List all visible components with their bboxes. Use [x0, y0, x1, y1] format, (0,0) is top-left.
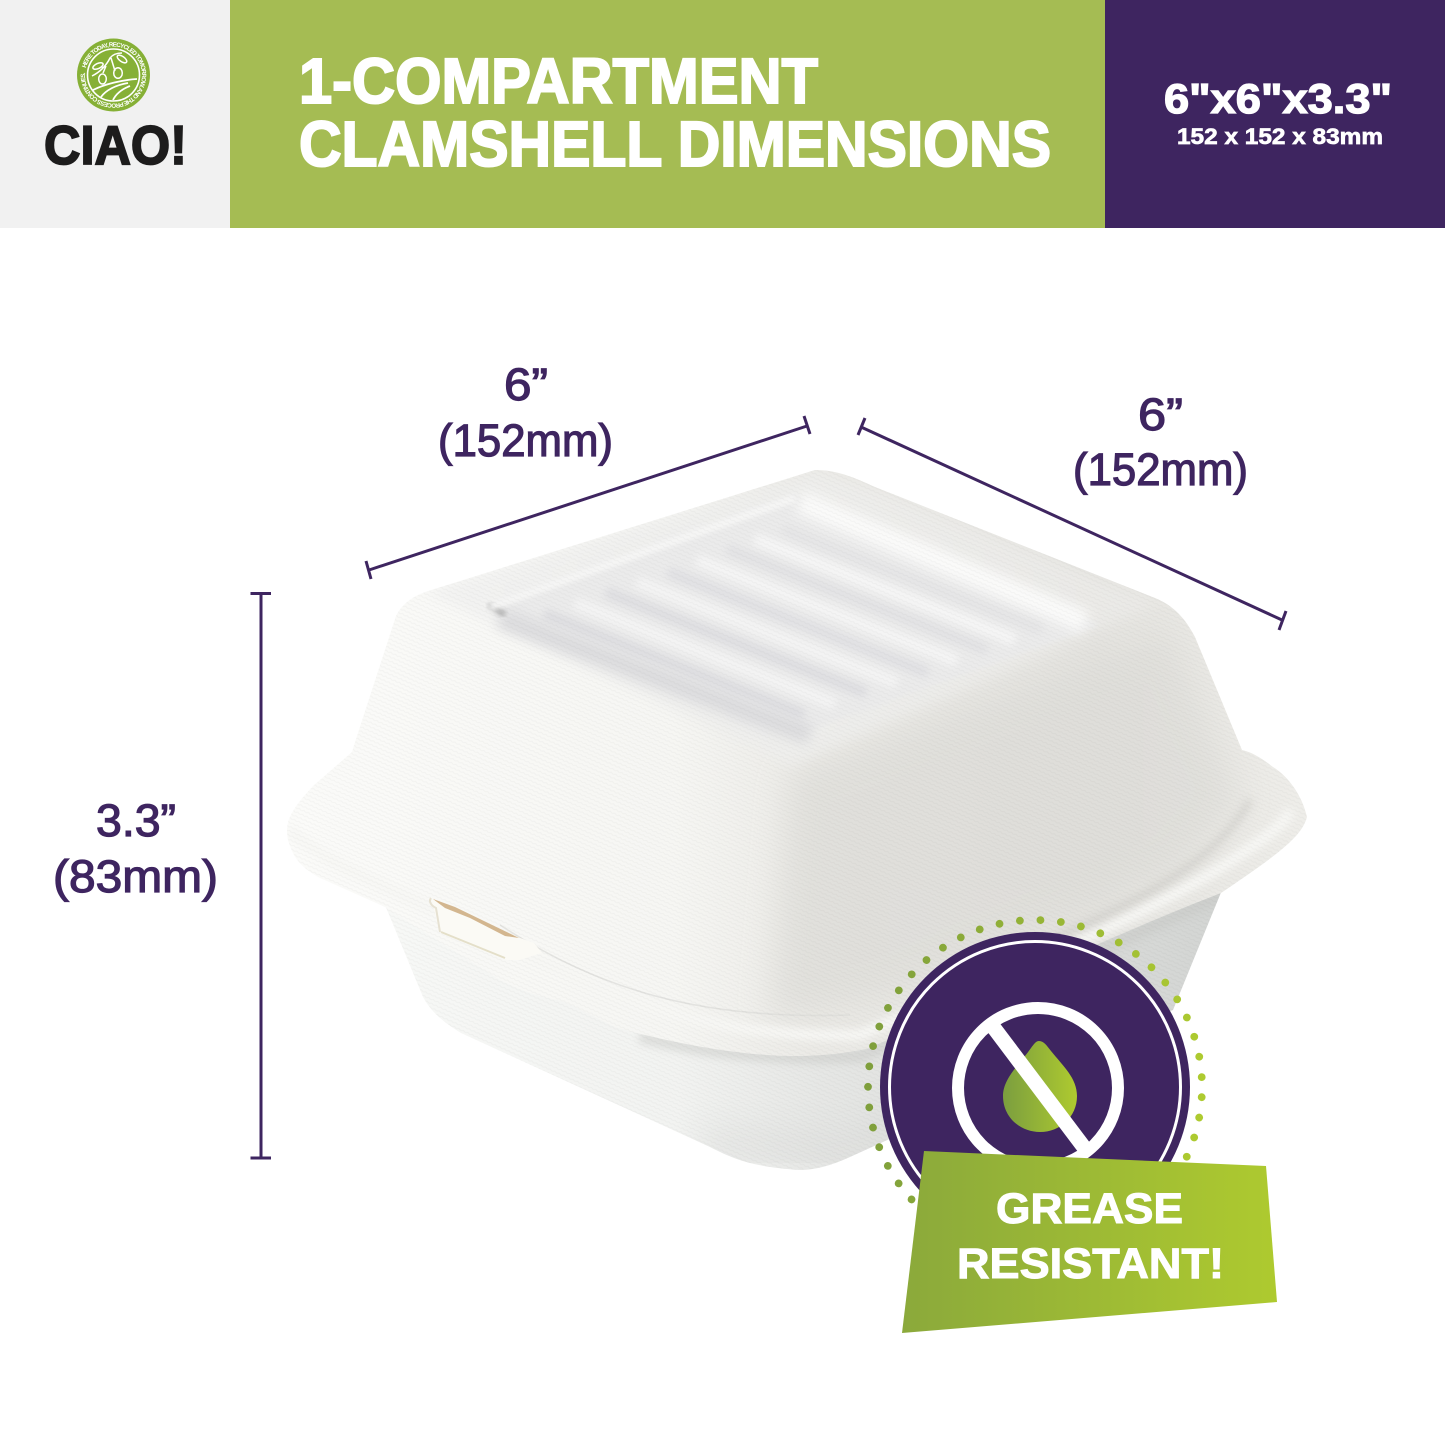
- ribbon text line 1: GREASE: [996, 1185, 1183, 1233]
- dimension label: height: 3.3”: [96, 795, 176, 846]
- container tray: [380, 880, 1230, 1175]
- icon: grease drop: [1003, 1041, 1077, 1132]
- size panel: [1105, 0, 1445, 228]
- grease resistant badge: [858, 910, 1277, 1333]
- dimension label: left width: 6”: [504, 359, 548, 410]
- dimension line: height: [250, 593, 271, 1158]
- logo panel: [0, 0, 230, 228]
- dimension label: right width: [1073, 389, 1248, 495]
- header band: [0, 0, 1445, 228]
- badge ribbon: [902, 1151, 1277, 1333]
- badge disc: [880, 932, 1190, 1242]
- lid latch: [430, 898, 542, 960]
- dimension line: right width: [858, 418, 1286, 630]
- title line 1: 1-COMPARTMENT: [299, 45, 818, 117]
- dimension label: right width: (152mm): [1073, 444, 1248, 495]
- dimension label: height: [53, 795, 218, 902]
- dimension label: left width: [438, 359, 613, 466]
- lid ribs: [546, 539, 1012, 715]
- title panel: [230, 0, 1105, 228]
- lid top face: [486, 490, 1098, 740]
- logo wordmark: CIAO!: [44, 114, 187, 176]
- title line 2: CLAMSHELL DIMENSIONS: [299, 108, 1051, 180]
- dimension label: height: (83mm): [53, 851, 218, 902]
- dimension label: left width: (152mm): [438, 415, 613, 466]
- icon: prohibition sign: [958, 1008, 1118, 1168]
- ribbon text line 2: RESISTANT!: [957, 1240, 1224, 1288]
- size in millimetres: 152 x 152 x 83mm: [1177, 124, 1383, 149]
- dimension line: left width: [366, 416, 810, 579]
- size in inches: 6"x6"x3.3": [1164, 75, 1392, 122]
- dimension label: right width: 6”: [1138, 389, 1183, 440]
- container lid: [280, 460, 1320, 1070]
- icon: olive branch seal: HERE TODAY, RECYCLED TOMORROW. AND THE PROCESS CONTINUES.: [80, 42, 146, 108]
- badge dot ring: [858, 910, 1212, 1264]
- lid flange ridge: [500, 800, 1290, 1040]
- clamshell container: [280, 460, 1320, 1175]
